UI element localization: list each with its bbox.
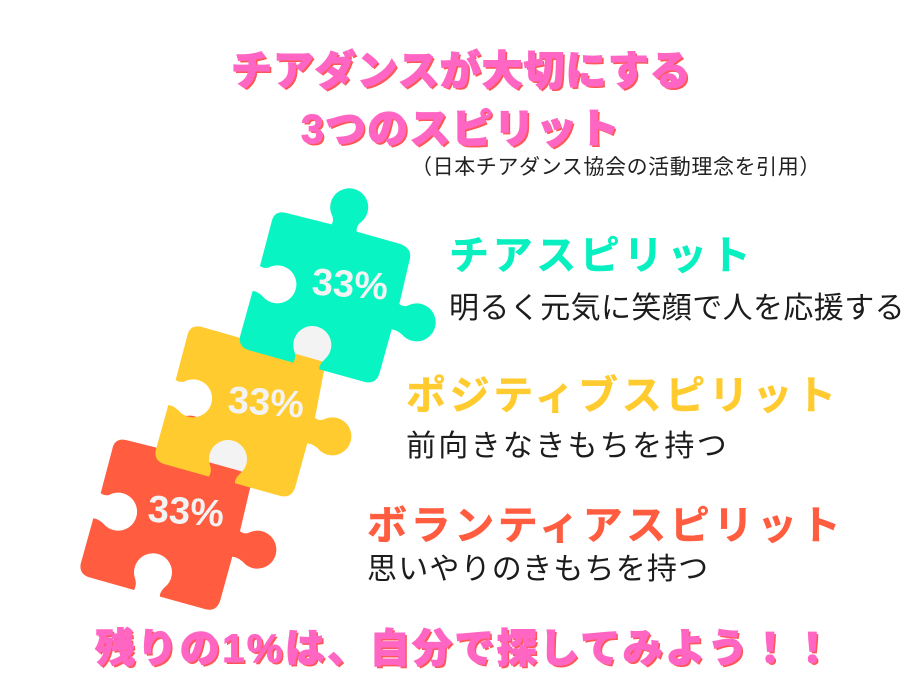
text: volunteer spirit: 思いやりのきもちを持つ — [367, 553, 709, 586]
closing message: 残りの1%は、自分で探してみよう！！ — [95, 627, 835, 671]
title: チアダンスが大切にする — [231, 48, 692, 94]
heading: volunteer spirit: ボランティアスピリット — [367, 504, 844, 548]
label: red 33%: 33% — [147, 488, 225, 536]
label: green 33%: 33% — [311, 261, 389, 309]
puzzle piece: green — [240, 188, 436, 382]
puzzle piece: red — [80, 416, 276, 610]
text: positive spirit: 前向きなきもちを持つ — [406, 430, 729, 463]
puzzle piece: yellow — [155, 326, 351, 496]
source note: （日本チアダンス協会の活動理念を引用） — [411, 156, 821, 179]
title line 2: 3つのスピリット — [301, 106, 620, 152]
label: yellow 33%: 33% — [227, 379, 305, 427]
heading: positive spirit: ポジティブスピリット — [406, 374, 840, 418]
heading: cheer spirit: チアスピリット — [449, 234, 754, 278]
text: cheer spirit: 明るく元気に笑顔で人を応援する — [449, 292, 905, 325]
hole backings — [209, 326, 331, 478]
